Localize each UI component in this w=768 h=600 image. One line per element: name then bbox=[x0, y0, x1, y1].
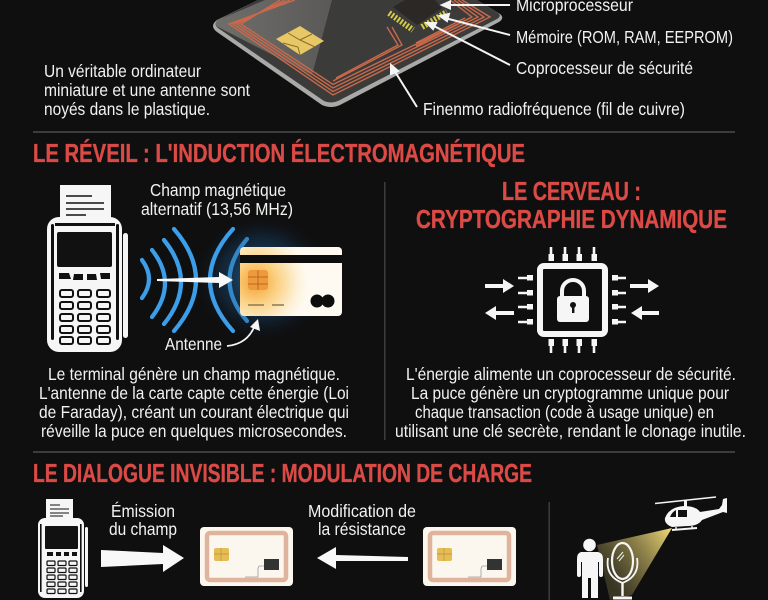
label: champ magnétique: Champ magnétique bbox=[150, 180, 286, 200]
intro text: noyés dans le plastique. bbox=[44, 99, 210, 119]
arrow: modification bbox=[317, 547, 408, 569]
intro text bbox=[44, 61, 250, 119]
searchlight beam bbox=[597, 528, 672, 600]
icon: payment terminal bbox=[47, 185, 128, 352]
label: émission du champ: Émission bbox=[111, 501, 175, 521]
card: passive card 1 bbox=[200, 527, 293, 586]
icon: helicopter bbox=[655, 497, 727, 530]
heading: le réveil: LE RÉVEIL : L'INDUCTION ÉLECTROMAGNÉTIQUE bbox=[33, 138, 525, 168]
text: cryptography explanation bbox=[395, 364, 746, 441]
callout arrows bbox=[391, 2, 510, 107]
label: émission du champ: du champ bbox=[109, 519, 177, 539]
icon: helicopter, beam, mirror and person bbox=[577, 497, 727, 600]
icon: person bbox=[577, 539, 603, 598]
text: terminal explanation: réveille la puce en quelques microsecondes. bbox=[41, 421, 347, 441]
arrow: field to card bbox=[157, 272, 233, 288]
intro text: Un véritable ordinateur bbox=[44, 61, 201, 81]
text: terminal explanation: L'antenne de la carte capte cette énergie (Loi bbox=[39, 383, 349, 403]
label: champ magnétique bbox=[141, 180, 293, 219]
icon: small terminal bbox=[38, 499, 88, 598]
label: modification de la résistance: Modification de bbox=[308, 501, 416, 521]
callout labels: Finenmo radiofréquence (fil de cuivre) bbox=[423, 99, 685, 119]
label: modification de la résistance: la résistance bbox=[318, 519, 406, 539]
label: émission du champ bbox=[109, 501, 177, 539]
icon: gold contact chip bbox=[276, 26, 324, 55]
callout labels bbox=[423, 0, 733, 119]
label: champ magnétique: alternatif (13,56 MHz) bbox=[141, 199, 293, 219]
heading: le cerveau: LE CERVEAU : bbox=[502, 176, 641, 206]
text: cryptography explanation: chaque transaction (code à usage unique) en bbox=[415, 402, 714, 422]
icon: secure chip with lock bbox=[485, 247, 659, 353]
label: antenne: Antenne bbox=[165, 334, 222, 354]
text: cryptography explanation: La puce génère un cryptogramme unique pour bbox=[411, 383, 729, 403]
text: terminal explanation bbox=[39, 364, 349, 441]
text: terminal explanation: de Faraday), créant un courant électrique qui bbox=[39, 402, 349, 422]
text: terminal explanation: Le terminal génère un champ magnétique. bbox=[48, 364, 340, 384]
icon: mirror bbox=[608, 543, 637, 598]
callout labels: Mémoire (ROM, RAM, EEPROM) bbox=[516, 27, 733, 47]
callout labels: Coprocesseur de sécurité bbox=[516, 58, 693, 78]
arrow: émission bbox=[101, 545, 184, 572]
label: antenne bbox=[165, 319, 260, 354]
heading: le dialogue invisible: LE DIALOGUE INVISIBLE : MODULATION DE CHARGE bbox=[33, 458, 532, 488]
heading: le cerveau bbox=[416, 176, 727, 234]
text: cryptography explanation: L'énergie alimente un coprocesseur de sécurité. bbox=[406, 364, 736, 384]
card: passive card 2 bbox=[423, 527, 516, 586]
icon: microprocessor bbox=[389, 0, 447, 30]
label: modification de la résistance bbox=[308, 501, 416, 539]
intro text: miniature et une antenne sont bbox=[44, 80, 250, 100]
smart card illustration bbox=[213, 0, 502, 107]
magnetic field waves and card bbox=[142, 216, 342, 340]
icon: bank card bbox=[240, 247, 342, 316]
